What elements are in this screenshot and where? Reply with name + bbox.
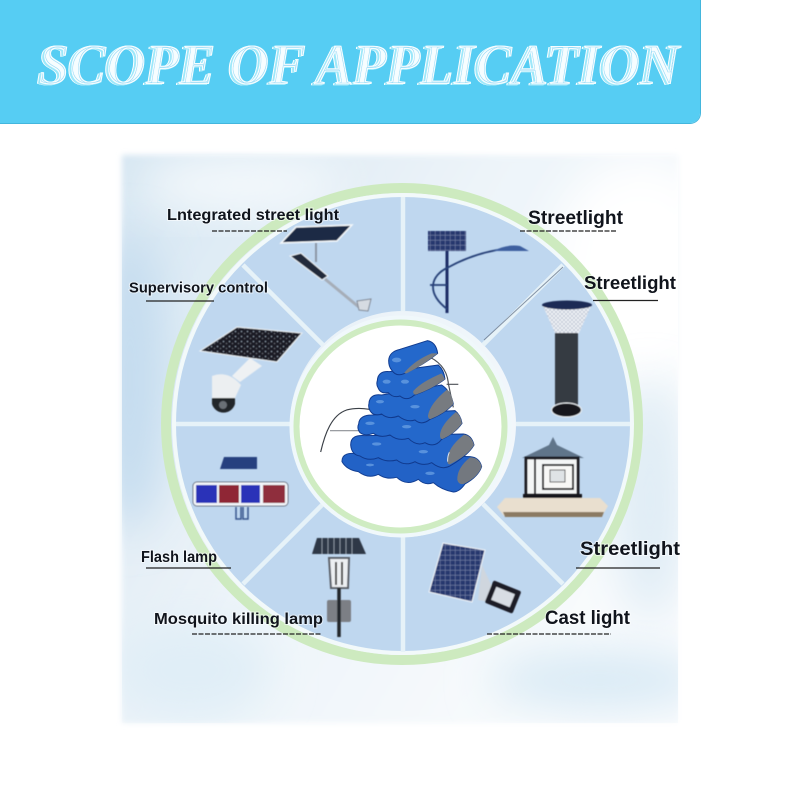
icon: battery pack bbox=[321, 341, 482, 492]
wires bbox=[321, 355, 458, 452]
battery highlights bbox=[365, 358, 435, 475]
battery row 4 bbox=[358, 411, 462, 445]
label: Streetlight lower right: Streetlight bbox=[580, 538, 681, 560]
label: Flash lamp: Flash lamp bbox=[141, 549, 217, 566]
battery row 5 bbox=[351, 434, 474, 468]
icon: flash lamp bbox=[193, 457, 288, 519]
battery row 3 bbox=[369, 385, 453, 423]
icon: solar flood light bbox=[429, 543, 521, 614]
icon: streetlight with solar panel bbox=[428, 231, 529, 313]
icon: integrated street light bbox=[281, 225, 371, 311]
icon: mosquito killing lamp bbox=[312, 538, 366, 637]
label: Supervisory control: Supervisory control bbox=[129, 280, 268, 296]
label: Streetlight lower right bbox=[576, 538, 681, 568]
title: SCOPE OF APPLICATION bbox=[39, 32, 682, 97]
label: Streetlight upper right: Streetlight bbox=[584, 273, 676, 293]
circular diagram bbox=[166, 188, 638, 660]
battery row 1 bbox=[389, 341, 438, 375]
icon: garden column lamp bbox=[542, 300, 592, 417]
icon: pillar lamp bbox=[497, 437, 608, 517]
label: Lntegrated street light: Lntegrated street light bbox=[167, 207, 340, 224]
header banner bbox=[0, 0, 700, 124]
label: Mosquito killing lamp: Mosquito killing lamp bbox=[154, 611, 323, 628]
battery row 6 bbox=[342, 453, 482, 492]
label: Streetlight top: Streetlight bbox=[528, 208, 624, 229]
panel: application background bbox=[120, 152, 678, 724]
label: Cast light: Cast light bbox=[545, 608, 631, 629]
battery row 2 bbox=[377, 365, 445, 399]
icon: solar camera bbox=[200, 327, 302, 413]
